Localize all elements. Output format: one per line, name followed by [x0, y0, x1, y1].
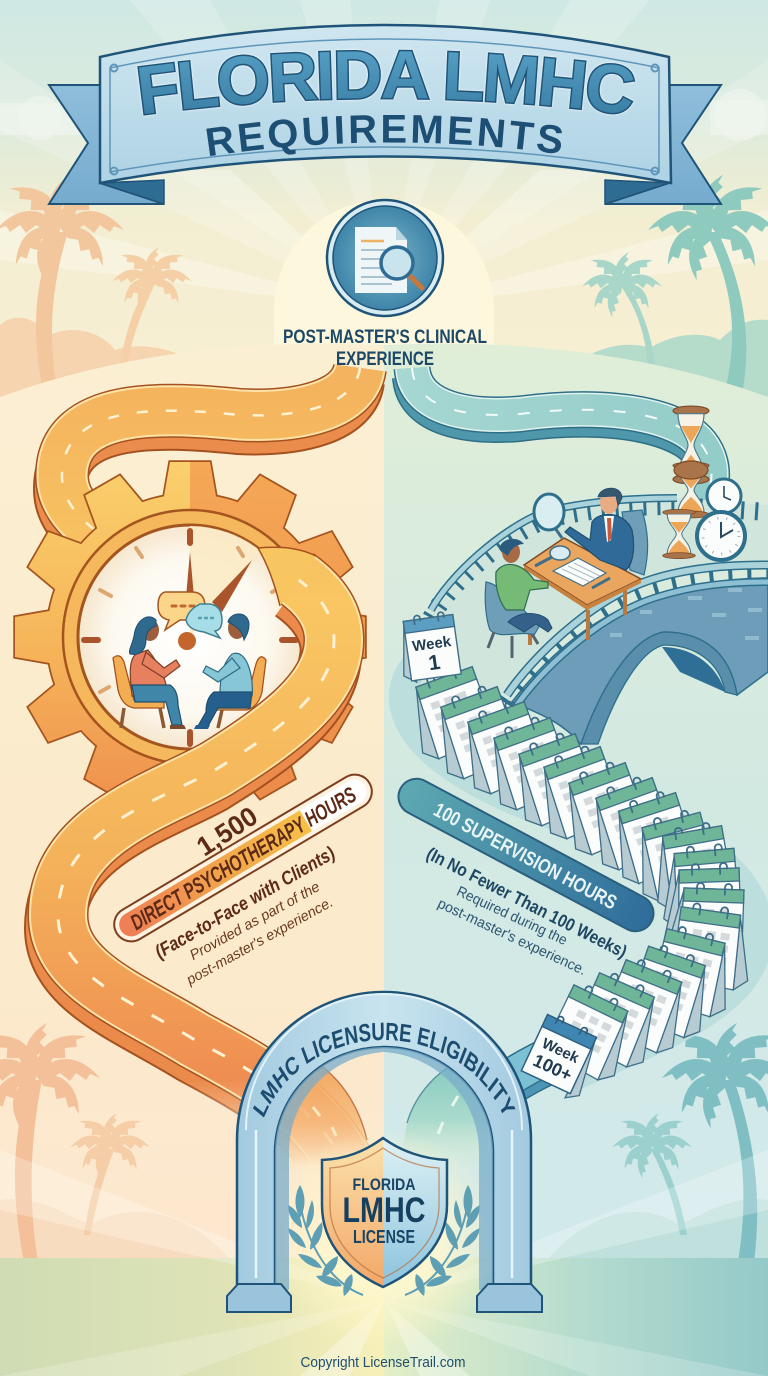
arch opening — [662, 647, 725, 692]
palm trees bottom right — [545, 1020, 768, 1262]
far railing — [431, 498, 768, 618]
shield text license: LICENSE — [353, 1227, 415, 1247]
shield laurels — [288, 1185, 480, 1296]
title line 1: FLORIDA LMHC — [136, 48, 636, 116]
left base — [227, 1284, 291, 1312]
banner plate — [100, 25, 671, 183]
clock face — [63, 510, 317, 764]
left ribbon fold — [100, 180, 164, 204]
teal road top — [411, 368, 712, 519]
pill: supervision hours — [392, 772, 660, 938]
palm trees top right — [580, 172, 768, 400]
icon: document with magnifying glass — [327, 200, 443, 316]
arch — [226, 990, 543, 1313]
supervisor figure — [565, 488, 648, 575]
palm trees top left — [0, 172, 192, 400]
gear — [10, 455, 370, 820]
hourglass stack — [663, 406, 709, 559]
in no fewer than line: (In No Fewer Than 100 Weeks) — [423, 843, 630, 962]
required text line 1: Required during the — [454, 884, 569, 949]
subheading: POST-MASTER'S CLINICAL — [283, 327, 487, 348]
clock large — [697, 512, 745, 560]
shield text lmhc: LMHC — [342, 1191, 426, 1230]
clock small — [707, 479, 741, 513]
copyright: Copyright LicenseTrail.com — [300, 1355, 466, 1371]
glow behind shield — [259, 1130, 509, 1350]
title line 2: REQUIREMENTS — [206, 115, 562, 156]
arch body — [237, 992, 531, 1290]
shield — [322, 1138, 447, 1287]
subheading: EXPERIENCE — [336, 349, 434, 370]
bridge wall — [512, 578, 768, 744]
orange road upper segment — [60, 368, 360, 561]
calendar week 100+ — [519, 1011, 606, 1103]
face-to-face line: (Face-to-Face with Clients) — [152, 843, 339, 963]
right ribbon tail — [605, 85, 721, 204]
bridge — [420, 498, 768, 744]
orange road taper — [258, 547, 316, 606]
table — [524, 538, 641, 645]
magnifying glass large — [534, 494, 564, 538]
shield text florida: FLORIDA — [352, 1175, 416, 1194]
orange road main segment — [55, 578, 350, 1188]
arch band — [581, 632, 737, 744]
left ribbon tail — [49, 85, 164, 204]
hills and main background panels — [0, 344, 768, 1262]
palm trees bottom left — [0, 1020, 232, 1262]
week 1 number: 1 — [427, 651, 442, 675]
arch lettering: LMHC LICENSURE ELIGIBILITY — [253, 1022, 516, 1118]
right ribbon fold — [605, 180, 669, 204]
small magnifier on table — [535, 557, 552, 566]
woman in chair — [113, 617, 186, 729]
subheading — [283, 327, 487, 370]
week 1 label: Week — [411, 633, 453, 655]
calendar row — [399, 662, 757, 1086]
week 100+ number: 100+ — [530, 1050, 575, 1085]
bricks — [610, 590, 762, 638]
required text line 2: post-master's experience. — [435, 896, 588, 979]
near railing — [507, 565, 768, 708]
calendar path band — [420, 680, 742, 1060]
1,500 figure: 1,500 — [191, 801, 263, 862]
pill text: 100 SUPERVISION HOURS — [430, 799, 620, 914]
right base — [477, 1284, 542, 1312]
background sky and ground — [0, 0, 768, 400]
road inside arch, orange side — [280, 1050, 372, 1178]
bridge deck — [420, 498, 768, 695]
provided text line 2: post-master's experience. — [183, 895, 336, 989]
provided text line 1: Provided as part of the — [187, 879, 323, 964]
road inside arch, teal side — [398, 1050, 488, 1178]
pill text: DIRECT PSYCHOTHERAPY HOURS — [126, 782, 361, 935]
sun dome behind icon — [274, 200, 494, 380]
week 100+ label: Week — [539, 1035, 582, 1067]
pill: direct psychotherapy hours — [108, 768, 378, 948]
ground with light rays — [0, 1150, 768, 1376]
student with chair — [485, 539, 552, 658]
paper on table — [553, 558, 606, 586]
calendar week 1 — [396, 611, 461, 684]
man in chair — [194, 614, 266, 729]
speech bubbles — [158, 592, 222, 638]
title banner — [47, 24, 723, 205]
clock hands — [178, 552, 252, 650]
blue road outside arch — [500, 1028, 610, 1094]
